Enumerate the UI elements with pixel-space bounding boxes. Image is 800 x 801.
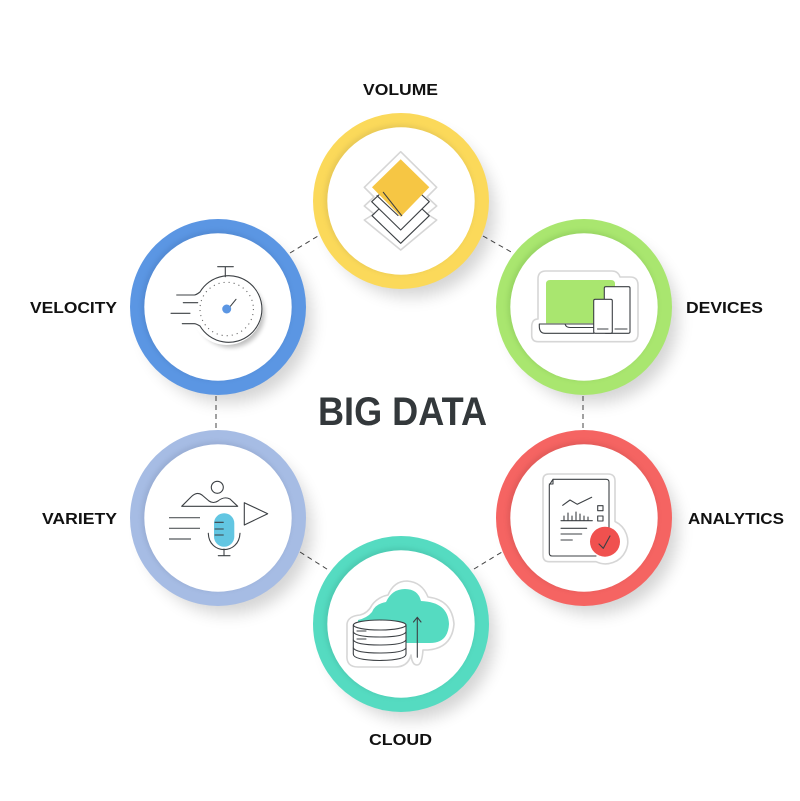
ring: cloud [313,536,495,720]
panel: analytics [496,430,784,614]
label: variety: VARIETY [42,511,117,528]
ring: volume [313,113,495,297]
ring: devices [496,219,678,403]
icon: report with check [543,474,628,564]
label: cloud: CLOUD [369,732,432,749]
icon: laptop and mobile devices [532,271,638,342]
panel: velocity [30,219,312,403]
title: BIG DATA [318,390,487,434]
icon: stacked layers [364,152,437,250]
ring: analytics [496,430,678,614]
ring: velocity [130,219,312,403]
panel: cloud [313,536,495,749]
panel: devices [496,219,763,403]
ring: variety [130,430,312,614]
icon: stopwatch [171,267,264,348]
label: analytics: ANALYTICS [688,511,784,528]
icon: mixed media [169,481,268,556]
panel: variety [42,430,312,614]
label: devices: DEVICES [686,300,763,317]
label: velocity: VELOCITY [30,300,117,317]
icon: cloud database upload [347,581,454,667]
dashed connectors [216,236,583,571]
label: volume: VOLUME [363,82,438,99]
panel: volume [313,82,495,297]
